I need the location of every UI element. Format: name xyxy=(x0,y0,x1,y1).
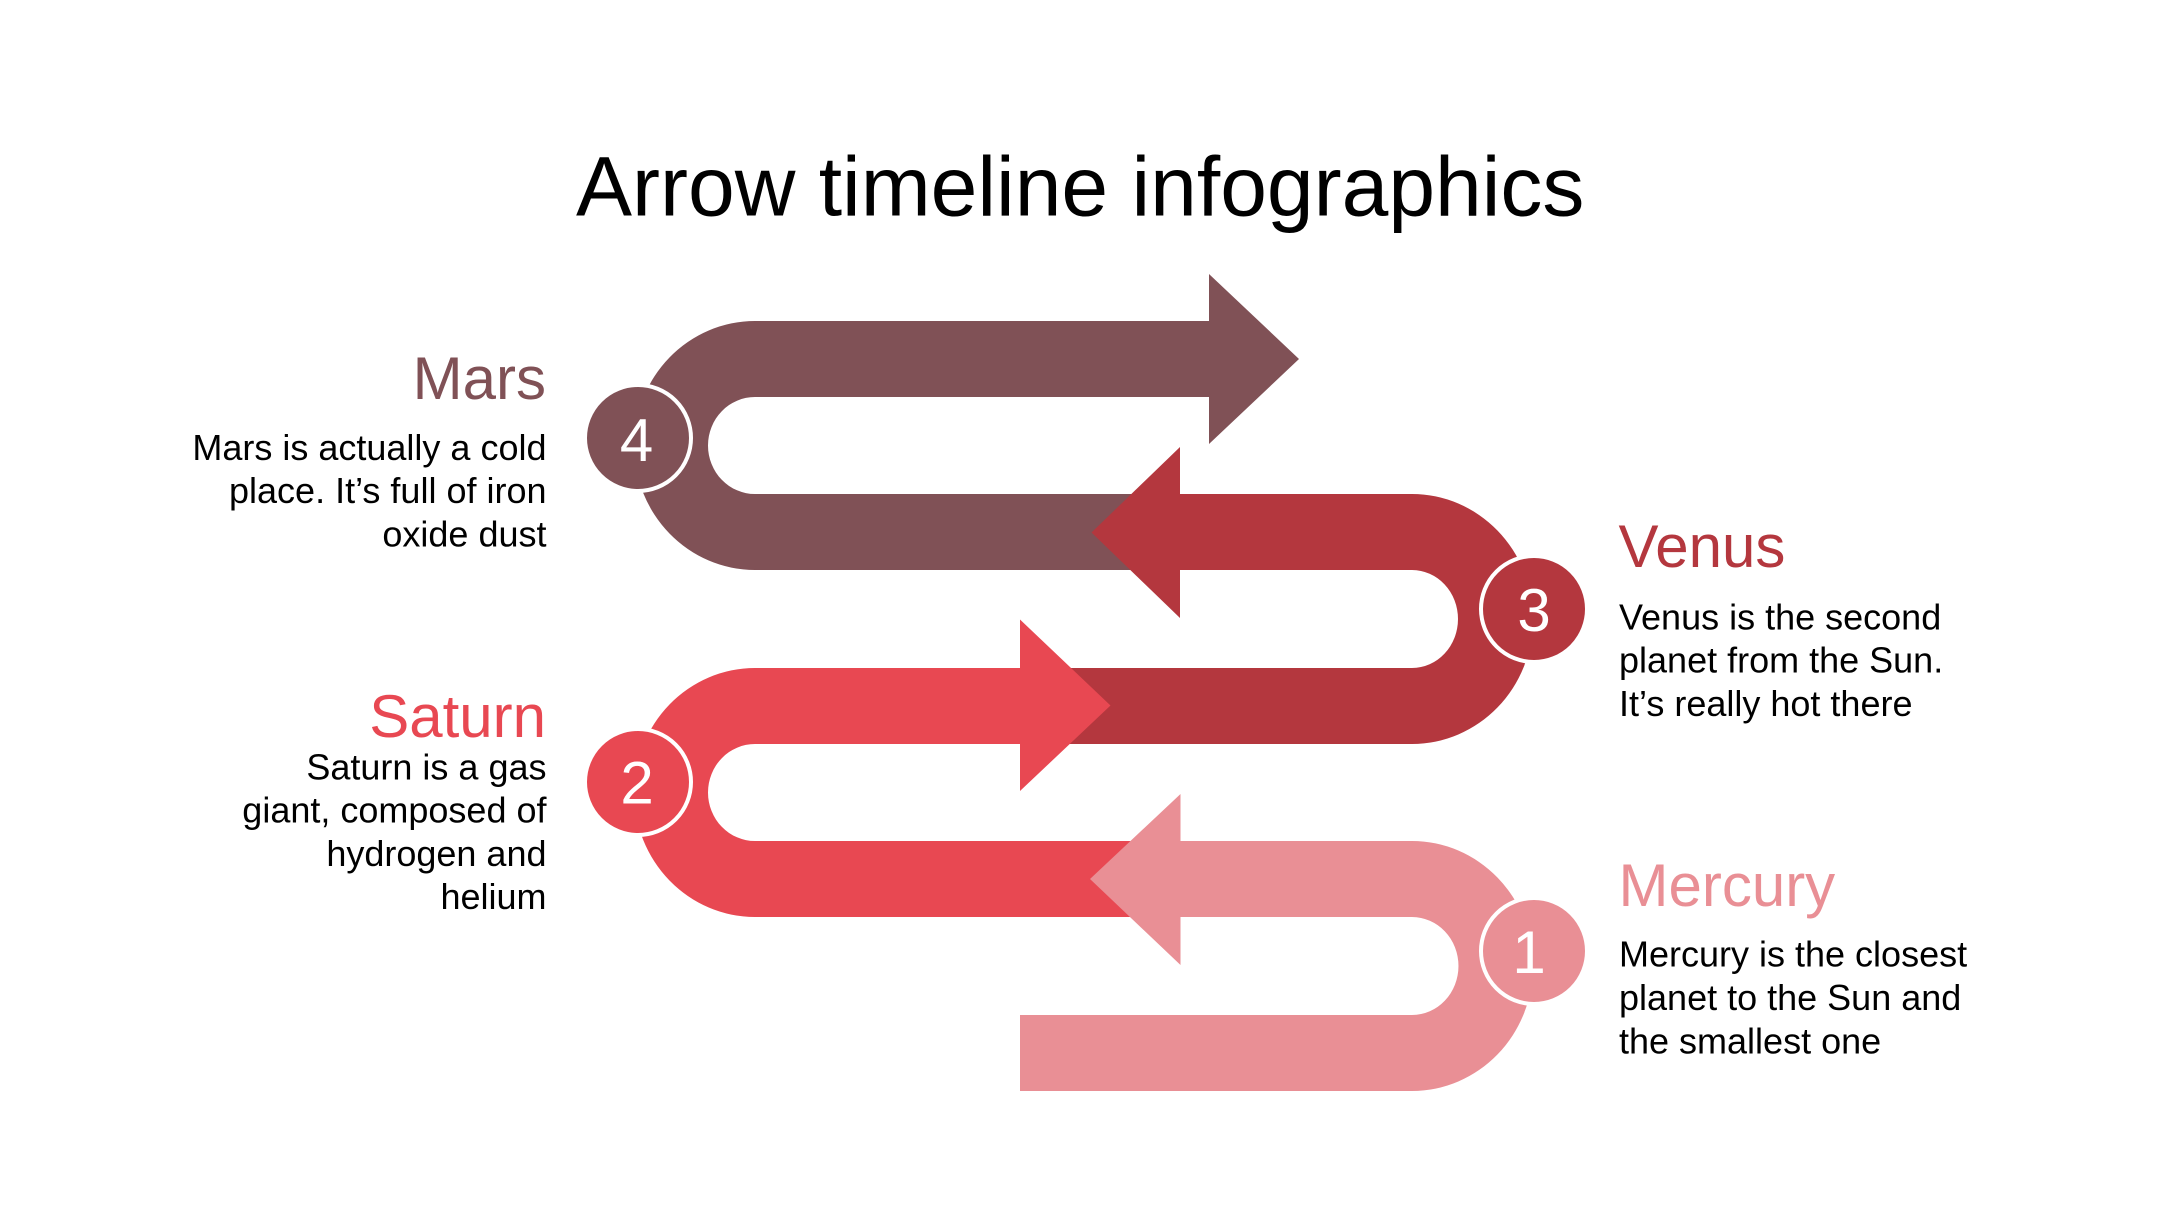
text block: Saturn: helium xyxy=(440,876,546,917)
text block: Mercury: Mercury is the closest xyxy=(1619,934,1967,974)
arrow: Mars xyxy=(634,274,1299,570)
text block: Venus: It’s really hot there xyxy=(1619,683,1912,724)
arrow: Mercury xyxy=(1020,794,1533,1091)
text block: Venus xyxy=(1618,513,1943,724)
text block: Venus: Venus xyxy=(1618,513,1785,580)
marker: 3: 3 xyxy=(1517,577,1551,644)
marker: 4: 4 xyxy=(620,407,653,474)
title: Arrow timeline infographics xyxy=(576,140,1584,234)
text block: Saturn: Saturn xyxy=(369,683,546,750)
text block: Saturn: giant, composed of xyxy=(242,790,547,830)
marker: 2: 2 xyxy=(620,750,654,816)
marker: 1 xyxy=(1481,898,1587,1004)
text block: Venus: Venus is the second xyxy=(1619,596,1941,638)
text block: Mars: Mars xyxy=(413,345,546,412)
text block: Mars: Mars is actually a cold xyxy=(192,427,546,468)
text block: Mercury: planet to the Sun and xyxy=(1619,977,1961,1018)
text block: Mercury: Mercury xyxy=(1618,852,1835,919)
marker: 1: 1 xyxy=(1512,919,1546,986)
marker: 3 xyxy=(1481,556,1587,662)
text block: Saturn xyxy=(242,683,547,917)
text block: Saturn: Saturn is a gas xyxy=(306,746,546,788)
text block: Mars: place. It’s full of iron xyxy=(229,470,546,511)
text block: Venus: planet from the Sun. xyxy=(1619,640,1943,680)
text block: Mars: oxide dust xyxy=(382,514,546,554)
text block: Saturn: hydrogen and xyxy=(326,833,546,874)
arrow: Saturn xyxy=(634,620,1135,917)
text block: Mercury: the smallest one xyxy=(1619,1020,1881,1062)
text block: Mars xyxy=(192,345,546,554)
text block: Mercury xyxy=(1618,852,1967,1062)
marker: 4 xyxy=(585,385,691,491)
arrow: Venus xyxy=(1065,447,1533,744)
marker: 2 xyxy=(585,729,691,835)
